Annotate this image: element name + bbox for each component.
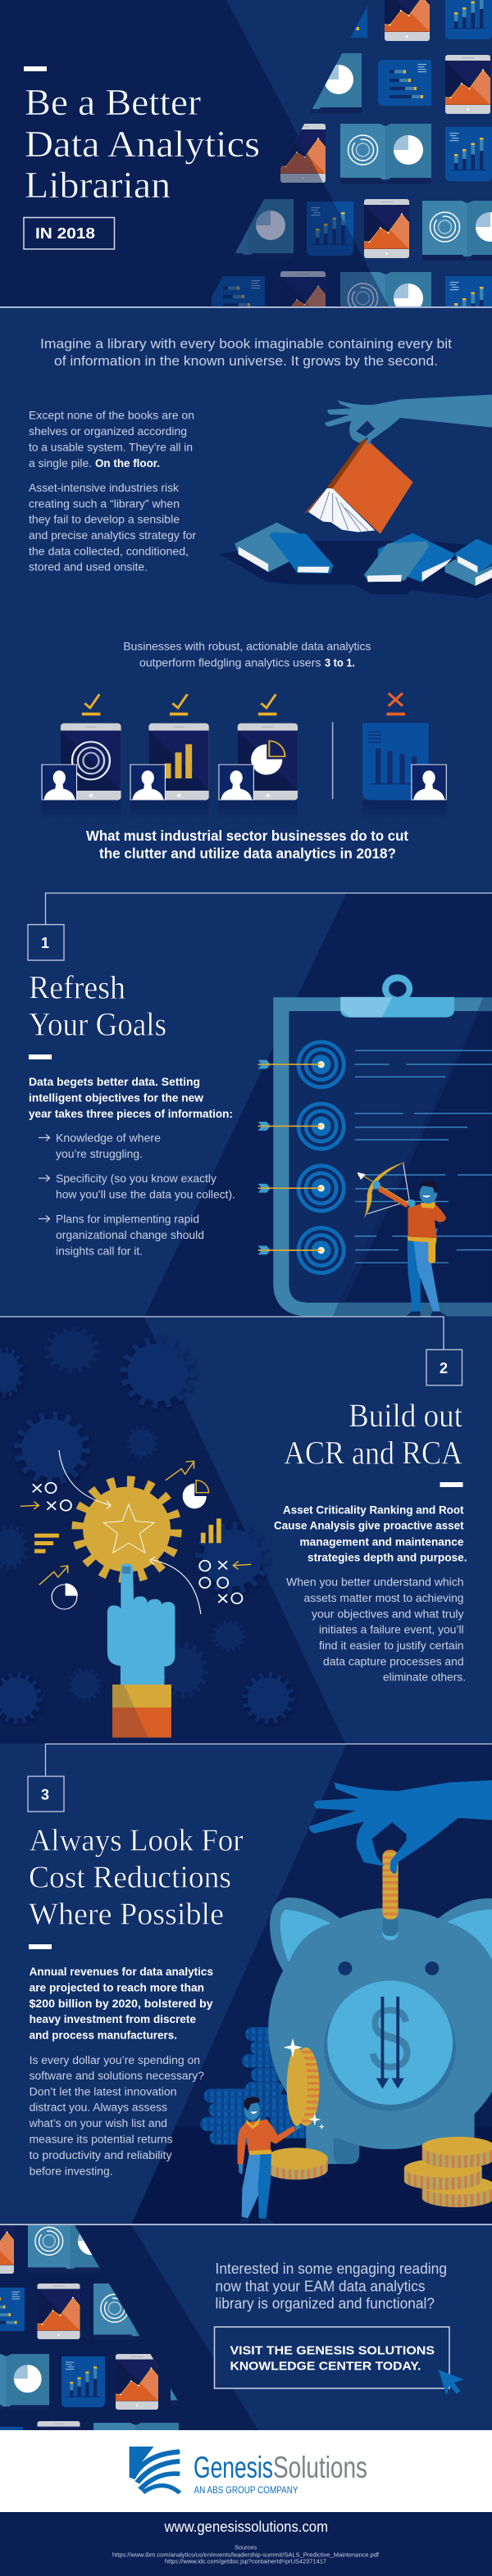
website: www.genesissolutions.com (164, 2519, 328, 2535)
list: three pieces of information: you’re struggling. (56, 1147, 143, 1160)
title: Be a Better (25, 81, 201, 123)
text: cost reduction body: software and solutions necessary? (30, 2070, 204, 2082)
icon: strategy marks and mini charts (20, 1461, 251, 1609)
text: revenue lead: $200 billion by 2020, bolstered by (30, 1998, 213, 2010)
text: revenue lead: and process manufacturers. (30, 2029, 177, 2042)
icon: hand holding coin (309, 1780, 492, 1874)
intro paragraphs: Asset-intensive industries risk (29, 481, 180, 494)
step number 3 (28, 1776, 64, 1812)
list: three pieces of information (39, 1131, 235, 1257)
text: ACR and RCA lead: Asset Criticality Ranking and Root (283, 1503, 464, 1516)
text: objectives lead: year takes three pieces of information: (29, 1107, 233, 1120)
heading: always look for cost reductions: Where Possible (29, 1898, 224, 1932)
year badge (24, 218, 115, 249)
title: Data Analytics (25, 123, 260, 165)
text: CTA question: now that your EAM data analytics (215, 2278, 425, 2294)
intro statement: Imagine a library with every book imaginable containing every bit (40, 337, 452, 351)
intro paragraphs: creating such a “library” when (29, 497, 180, 510)
text: ACR and RCA body: assets matter most to achieving (303, 1591, 464, 1604)
text: ACR and RCA body: find it easier to justify certain (319, 1639, 464, 1652)
text: cost reduction body: Is every dollar you’re spending on (30, 2054, 200, 2066)
text: revenue lead (30, 1966, 213, 2042)
text: ACR and RCA lead: Cause Analysis give proactive asset (274, 1519, 464, 1532)
stat sentence: 3 to 1. (325, 656, 355, 669)
step number 2: 2 (440, 1360, 448, 1376)
heading: always look for cost reductions (29, 1824, 244, 1932)
stat sentence: Businesses with robust, actionable data analytics (123, 640, 371, 652)
text: objectives lead: Data begets better data. Setting (29, 1075, 200, 1088)
icon: coin dropping into slot (382, 1850, 399, 1920)
list: three pieces of information: how you’ll use the data you collect). (56, 1188, 235, 1201)
intro paragraphs: the data collected, conditioned, (29, 544, 189, 557)
heading: build out ACR and RCA: ACR and RCA (284, 1435, 462, 1472)
text: cost reduction body: distract you. Always assess (30, 2102, 167, 2114)
step divider line (0, 1317, 444, 1349)
icon: gold coin stacks (265, 2137, 492, 2207)
text: ACR and RCA body: initiates a failure event, you’ll (319, 1623, 464, 1636)
intro paragraphs: shelves or organized according (29, 424, 187, 438)
icon: blue coin stacks (200, 2027, 306, 2144)
intro paragraphs: Except none of the books are on (29, 409, 194, 422)
icon: piggy bank: S (367, 1989, 413, 2089)
text: cost reduction body: before investing. (30, 2166, 113, 2178)
stat sentence: outperform fledgling analytics users (139, 656, 321, 669)
text: revenue lead: heavy investment from discrete (30, 2013, 196, 2025)
user 3: tablet with pie chart (219, 694, 298, 800)
step number 1: 1 (41, 935, 49, 951)
icon: falling orange book (303, 436, 413, 534)
text: cost reduction body: what’s on your wish list and (29, 2117, 167, 2129)
CTA button: VISIT THE GENESIS SOLUTIONS (230, 2343, 435, 2357)
logo wordmark: Solutions (273, 2451, 367, 2484)
text: objectives lead: intelligent objectives for the new (29, 1091, 203, 1104)
step 1 connector line (46, 893, 492, 924)
comparison of analytics users (42, 693, 447, 821)
icon: cursor (439, 2370, 464, 2395)
step 3 connector line (46, 1744, 492, 1776)
panel: step 2 build out ACR and RCA (0, 1317, 492, 1744)
intro paragraphs: stored and used onsite. (29, 560, 148, 574)
icon: man holding giant coin (238, 2048, 320, 2223)
text: CTA question: Interested in some engaging reading (215, 2261, 447, 2277)
intro statement: of information in the known universe. It grows by the second. (54, 354, 438, 369)
heading: always look for cost reductions: Always Look For (30, 1824, 244, 1858)
text: ACR and RCA body: eliminate others. (383, 1671, 466, 1684)
checklist lines (354, 1050, 492, 1263)
icon: Genesis Solutions mark (130, 2447, 180, 2493)
intro paragraphs: and precise analytics strategy for (29, 528, 196, 542)
heading: build out ACR and RCA (284, 1397, 462, 1472)
CTA button: KNOWLEDGE CENTER TODAY. (230, 2360, 421, 2374)
panel: hero (0, 0, 492, 332)
year badge: IN 2018 (35, 225, 95, 242)
text: ACR and RCA lead: strategies depth and purpose. (308, 1551, 467, 1564)
text: cost reduction body (29, 2054, 204, 2178)
intro statement (40, 337, 452, 369)
book and tablet icon wall (0, 0, 492, 332)
icon: sparkles (284, 2038, 325, 2129)
text: ACR and RCA body (286, 1575, 466, 1684)
icon: golden gear with star (79, 1482, 175, 1576)
step number 3: 3 (41, 1786, 49, 1803)
text: cost reduction body: to productivity and reliability (30, 2149, 172, 2161)
key question: the clutter and utilize data analytics in 2018? (99, 845, 396, 861)
logo wordmark: AN ABS GROUP COMPANY (194, 2484, 298, 2496)
illustration: clipboard (281, 974, 492, 1317)
step number 2 (426, 1349, 462, 1386)
list: three pieces of information: organizational change should (56, 1228, 204, 1241)
text: ACR and RCA body: your objectives and what truly (312, 1608, 464, 1621)
intro paragraphs: On the floor. (95, 456, 160, 469)
list: three pieces of information: Specificity (so you know exactly (56, 1172, 216, 1185)
heading: refresh your goals: Your Goals (29, 1006, 166, 1043)
text: ACR and RCA body: When you better understand which (286, 1575, 464, 1588)
panel: logo (0, 2430, 492, 2512)
icon: hand (325, 395, 492, 445)
panel: step 3 cost reductions (0, 1744, 492, 2225)
intro paragraphs (29, 409, 196, 574)
illustration: archer (357, 1161, 449, 1317)
intro paragraphs: they fail to develop a sensible (29, 513, 180, 526)
list: three pieces of information: Plans for implementing rapid (56, 1212, 199, 1225)
icon: piggy bank (268, 1898, 492, 2164)
step number 1 (28, 924, 64, 960)
intro paragraphs: a single pile. (29, 456, 92, 469)
arrows: curved white (59, 1450, 201, 1614)
key question: What must industrial sector businesses do to cut (86, 828, 408, 844)
heading: refresh your goals (29, 969, 166, 1043)
intro paragraphs: to a usable system. They’re all in (29, 440, 193, 453)
list: three pieces of information: insights call for it. (56, 1244, 143, 1257)
user 2: tablet with bar chart (130, 694, 209, 800)
book and tablet icon wall (0, 2225, 179, 2430)
panel: step 1 refresh your goals (28, 892, 492, 1317)
panel: call to action (0, 2225, 464, 2430)
sources: Sources (235, 2544, 257, 2551)
title (25, 81, 260, 206)
text: CTA question (215, 2261, 447, 2311)
list: three pieces of information: Knowledge of where (56, 1131, 161, 1144)
sources (112, 2544, 380, 2565)
text: ACR and RCA lead (274, 1503, 467, 1564)
decorative gears (0, 1329, 244, 1700)
icon: pile of books (235, 523, 492, 586)
text: cost reduction body: measure its potential returns (30, 2134, 173, 2146)
heading: refresh your goals: Refresh (29, 969, 125, 1006)
sources: https://www.ibm.com/analytics/us/en/events/leadership-summit/SALS_Predictive_Maintenance.pdf (112, 2551, 380, 2558)
heading: build out ACR and RCA: Build out (348, 1397, 462, 1434)
text: ACR and RCA lead: management and maintenance (300, 1535, 464, 1548)
text: objectives lead (29, 1075, 233, 1120)
logo wordmark (194, 2451, 367, 2496)
text: ACR and RCA body: data capture processes and (323, 1655, 464, 1668)
hero accent bar (24, 66, 47, 71)
user 1: tablet with target (42, 694, 121, 800)
logo wordmark: Genesis (194, 2451, 273, 2484)
user 4: fledgling user with flat report (362, 693, 446, 800)
text: revenue lead: Annual revenues for data analytics (30, 1966, 213, 1978)
panel: footer (0, 2512, 492, 2576)
title: Librarian (25, 164, 171, 206)
CTA button (215, 2327, 449, 2388)
illustration: hand dropping book onto pile (220, 395, 492, 598)
text: CTA question: library is organized and functional? (215, 2295, 435, 2311)
stat sentence (123, 640, 371, 669)
targets with arrows (258, 1040, 346, 1275)
text: cost reduction body: Don’t let the latest innovation (30, 2085, 177, 2098)
key question (86, 828, 408, 861)
icon: pointing hand and sleeve (107, 1563, 175, 1738)
heading: always look for cost reductions: Cost Reductions (29, 1861, 231, 1895)
text: revenue lead: are projected to reach more than (30, 1981, 204, 1993)
sources: https://www.idc.com/getdoc.jsp?containerId=prUS42371417 (165, 2558, 326, 2565)
